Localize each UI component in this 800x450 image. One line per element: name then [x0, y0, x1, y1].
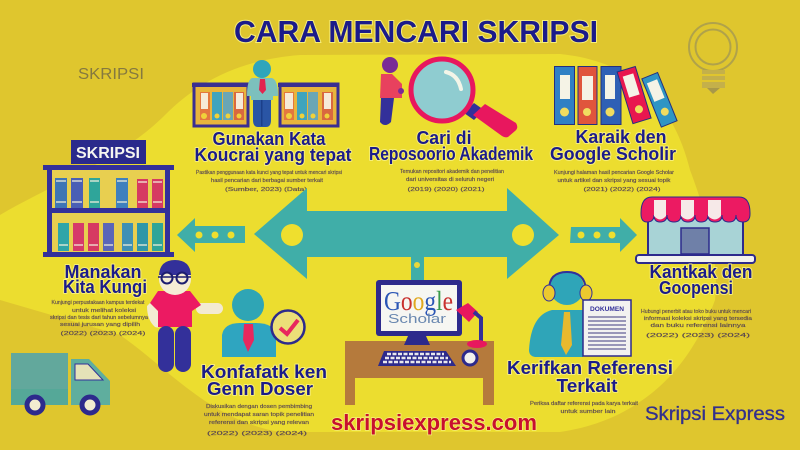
description: Hubungi penerbit atau toko buku untuk mencari [641, 309, 751, 315]
panel: google scholar [550, 66, 677, 193]
heading line two: Google Scholir [550, 144, 676, 164]
description: informasi koleksi skripsi yang tersedia [644, 316, 752, 322]
heading line two: Terkait [556, 376, 618, 396]
heading line two: Genn Doser [207, 379, 313, 399]
description: untuk melihat koleksi [72, 308, 136, 314]
icon: person between shelves [192, 60, 339, 127]
description [400, 169, 504, 193]
description: (2021) (2022) (2024) [584, 187, 661, 193]
heading line two: Goopensi [659, 278, 733, 298]
panel: repositori [369, 57, 534, 193]
heading line two: Kita Kungi [63, 277, 147, 297]
description: dari universitas di seluruh negeri [406, 177, 494, 183]
icon: storefront [636, 197, 755, 263]
description: (2019) (2020) (2021) [408, 187, 485, 193]
panel: referensi [507, 271, 673, 415]
heading: kata kunci: Gunakan Kata [212, 129, 326, 149]
heading: dosen: Konfafatk ken [201, 362, 327, 382]
description: untuk mendapat saran topik penelitian [204, 412, 314, 418]
heading: manakan: Manakan [64, 262, 142, 282]
icon: computer desk with google scholar [345, 280, 494, 405]
description: (2022) (2023) (2024) [60, 331, 146, 337]
description: Kunjungi halaman hasil pencarian Google Scholar [554, 170, 674, 176]
heading: scholar: Karaik den [576, 127, 666, 147]
heading line two: Reposoorio Akademik [369, 144, 534, 164]
description: (2022) (2023) (2024) [207, 431, 308, 437]
description: hasil pencarian dari berbagai sumber terkait [211, 178, 324, 184]
brand name: Skripsi Express [645, 404, 785, 425]
title: CARA MENCARI SKRIPSI [234, 14, 598, 49]
description: (2022) (2023) (2024) [646, 333, 751, 339]
description: Temukan repositori akademik dan penelitian [400, 169, 504, 175]
sign text: SKRIPSI [76, 145, 140, 162]
icon: person with headset and document [529, 271, 631, 357]
icon: bookshelf [43, 140, 174, 257]
panel: kata kunci [192, 60, 352, 193]
description [641, 309, 752, 339]
description [554, 170, 674, 193]
panel: kontak penerbit [636, 197, 755, 339]
icon: consultant with check [222, 289, 304, 357]
description: skripsi dan tesis dari tahun sebelumnya [50, 315, 148, 321]
heading: repositori: Cari di [416, 128, 472, 148]
arrow: left small [177, 218, 245, 252]
description: Periksa daftar referensi pada karya terkait [530, 401, 639, 407]
description: untuk artikel dan skripsi yang sesuai topik [558, 178, 671, 184]
heading line two: Koucrai yang tepat [194, 145, 352, 165]
arrow: center double arrow [254, 188, 559, 281]
screen text: google: Google [384, 286, 453, 316]
description [196, 170, 342, 193]
description: Diskusikan dengan dosen pembimbing [206, 404, 312, 410]
panel: dosen [201, 289, 327, 437]
description: sesuai jurusan yang dipilih [60, 322, 140, 328]
description [530, 401, 639, 415]
heading: referensi: Kerifkan Referensi [507, 358, 673, 378]
heading: kontak: Kantkak den [650, 262, 752, 282]
description: Kunjungi perpustakaan kampus terdekat [52, 300, 145, 306]
description [50, 300, 148, 337]
icon: light bulb [689, 23, 737, 94]
arrow: right small [570, 218, 637, 252]
website url: skripsiexpress.com [331, 410, 537, 435]
description: (Sumber, 2023) (Data) [225, 187, 307, 193]
icon: person with glasses [147, 260, 223, 372]
icon: delivery truck [11, 353, 110, 413]
description: dan buku referensi lainnya [650, 323, 746, 329]
screen text: scholar: Scholar [388, 311, 447, 326]
document label: DOKUMEN [590, 307, 624, 313]
icon: person with magnifier [380, 57, 517, 137]
description: untuk sumber lain [560, 409, 616, 415]
description: referensi dan skripsi yang relevan [209, 420, 309, 426]
icon: binders [554, 66, 677, 127]
faint label: skripsi: SKRIPSI [78, 66, 144, 83]
panel: perpustakaan [50, 262, 148, 337]
description: Pastikan penggunaan kata kunci yang tepat untuk mencari skripsi [196, 170, 342, 176]
description [204, 404, 314, 437]
